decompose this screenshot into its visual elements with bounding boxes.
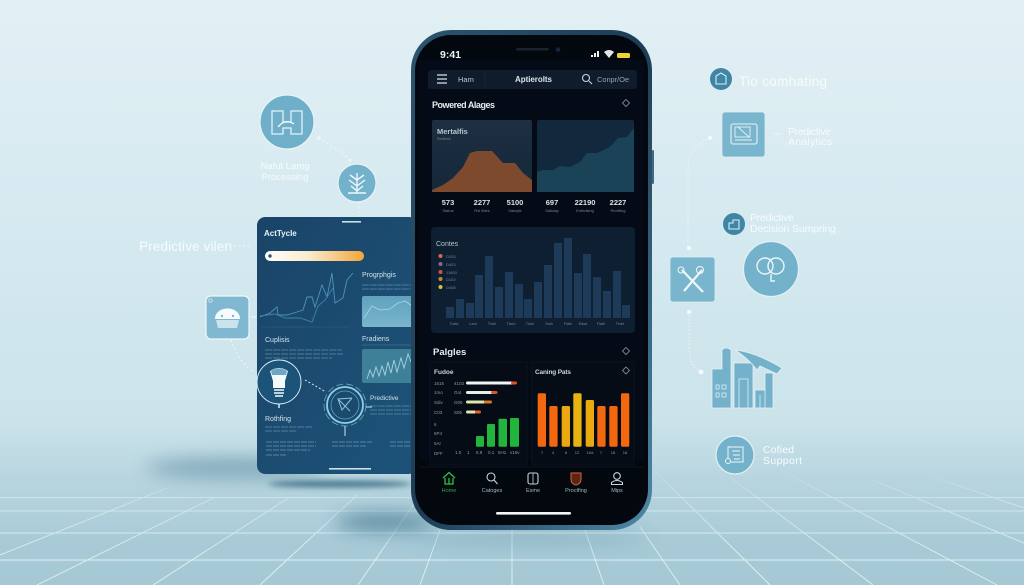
row labels: 0.1: [488, 450, 495, 455]
label: predictive analytics: [788, 126, 832, 148]
icon: tools: [670, 257, 715, 302]
tab: pricing: Proctfing: [565, 488, 587, 494]
phone body: [411, 30, 652, 530]
stats row: 2227: [610, 198, 626, 207]
row labels: DFF: [434, 451, 443, 456]
legend: D102: [446, 277, 456, 282]
stats row: 5100: [507, 198, 523, 207]
label: support: [763, 444, 802, 467]
row labels: 4103: [454, 381, 465, 386]
tab: home: [442, 472, 456, 494]
tablet top handle: [342, 221, 361, 223]
x axis labels: Tolas: [450, 322, 459, 326]
legend: D203: [446, 254, 456, 259]
label: predictive analytics: Analytics: [788, 136, 832, 148]
label: predictive decision support: Decision Sumpring: [750, 223, 836, 235]
icon: buildings and hammer: [712, 348, 782, 408]
panel: orange bars: 7: [600, 450, 603, 455]
nav bar: Conpr/Oe: [597, 75, 629, 84]
panel: orange bars: 4: [552, 450, 555, 455]
row labels: Got: [454, 390, 462, 395]
tab: learn: [526, 473, 540, 494]
mini chart: light area: [362, 296, 411, 327]
tablet title: ActTycle: [264, 229, 297, 238]
x axis labels: Tkdrt: [616, 322, 625, 326]
icon: dome face: [206, 296, 256, 339]
icon: top right badge: [710, 68, 732, 90]
legend: D408: [446, 285, 456, 290]
label: top right heading: Tio comhating: [739, 74, 827, 89]
stats row: 22190: [575, 198, 595, 207]
text block: rothfing: [265, 416, 412, 455]
stats row: 2277: [474, 198, 490, 207]
screen tint: [419, 60, 644, 460]
x axis labels: Scth: [545, 322, 553, 326]
status bar time: 9:41: [440, 49, 461, 61]
side button: [652, 150, 654, 184]
card: area chart teal: [537, 120, 634, 192]
stats row: Rol fides: [474, 208, 490, 213]
text block: prognosis: Progrphgis: [362, 272, 396, 279]
tablet bottom handle: [329, 468, 371, 470]
x axis labels: Edsrt: [579, 322, 588, 326]
tab: learn: Esme: [526, 488, 540, 494]
nav bar: [428, 70, 637, 89]
horizontal bars: [466, 382, 517, 414]
icon: light bulb: [257, 360, 301, 408]
panel: main bar chart: [431, 227, 635, 333]
legend: J1603: [446, 270, 458, 275]
panel: orange bars: 18: [611, 450, 616, 455]
label: natural language processing: Nafut Lamg: [260, 161, 310, 172]
phone: [411, 30, 654, 530]
home indicator: [496, 512, 571, 515]
card: area chart orange: Mertalfis: [437, 127, 468, 136]
icon: tree: [338, 164, 376, 202]
x axis labels: Flath: [597, 322, 605, 326]
nav bar: Ham: [458, 75, 474, 84]
text block: predictions: [362, 336, 412, 345]
icon: predictive analytics: [722, 112, 765, 157]
text block: captions: Cuplisis: [265, 337, 290, 344]
panel: orange bars: [532, 362, 634, 465]
row labels: 1mo: [434, 390, 443, 395]
text block: rothfing: Rothfing: [265, 416, 291, 423]
floor shadows: [145, 458, 650, 543]
label: natural language processing: Processing: [262, 172, 308, 183]
legend: [438, 254, 458, 290]
row labels: C03: [434, 410, 443, 415]
text block: predictions: Fradiens: [362, 336, 390, 343]
tab: home: Home: [442, 488, 456, 494]
stats row: 697: [546, 198, 558, 207]
tab: maps: Mips: [611, 488, 623, 494]
connector: right dotted path: [687, 136, 712, 374]
label: predictive vision: Predictive vilen: [139, 239, 232, 254]
label: support: Cofied: [763, 444, 794, 456]
row labels: 1615: [434, 381, 445, 386]
text block: captions: [265, 337, 343, 358]
panel: orange bars: 6: [565, 450, 568, 455]
section heading: ratings: Palgles: [433, 347, 466, 358]
stats row: 573: [442, 198, 454, 207]
label: predictive analytics: Predictive: [788, 126, 831, 138]
row labels: Sdiv: [434, 400, 444, 405]
row labels: 5H1: [498, 450, 507, 455]
x axis labels: Tlotn: [526, 322, 534, 326]
chart divider: [262, 326, 350, 328]
connector: bulb to target: [305, 380, 326, 392]
stats row: Sample: [508, 208, 523, 213]
panel: orange bars: 18: [623, 450, 628, 455]
row labels: 1: [467, 450, 470, 455]
icon: target ring: [324, 384, 372, 436]
x axis labels: [450, 322, 625, 326]
x axis labels: Tlsch: [506, 322, 516, 326]
row labels: 5Ar: [434, 441, 442, 446]
stats row: Rentfing: [611, 208, 625, 213]
panel: tablet dashboard: [257, 217, 417, 474]
icon: natural language processing: [260, 95, 314, 149]
row labels: [434, 381, 520, 456]
card: area chart orange: Realtime: [437, 137, 451, 141]
panel: funnel bars: [430, 362, 527, 465]
x axis labels: Lant: [469, 322, 478, 326]
stats row: [442, 198, 626, 213]
text block: predictive: Predictive: [370, 395, 399, 402]
row labels: 6: [434, 422, 437, 427]
panel: orange bars: 7: [541, 450, 544, 455]
panel: orange bars: Caning Pats: [535, 369, 571, 376]
status icons: [591, 50, 630, 58]
section heading: powered: [432, 100, 630, 110]
icon: support: [716, 436, 754, 474]
x axis labels: Tloth: [488, 322, 496, 326]
text block: predictive: [370, 395, 412, 414]
panel: funnel bars: Fudoe: [434, 369, 454, 376]
stats row: Status: [442, 208, 454, 213]
x axis labels: Flath: [564, 322, 572, 326]
section heading: ratings: [433, 347, 630, 358]
tab: categories: Catoges: [482, 488, 502, 494]
panel: main bar chart: Contes: [436, 241, 459, 248]
stats row: Saltday: [545, 208, 559, 213]
speaker and camera: [516, 47, 560, 52]
row labels: G05: [454, 400, 463, 405]
section heading: powered: Powered Alages: [432, 100, 495, 110]
text block: prognosis: [362, 272, 412, 289]
label: support: Support: [763, 455, 802, 467]
connector: left dotted paths: [231, 136, 359, 372]
icon: linked rings: [744, 242, 798, 296]
label: predictive decision support: [750, 212, 836, 235]
panel: orange bars: 10d: [587, 450, 593, 455]
nav bar: Aptierolts: [515, 75, 553, 84]
phone screen: [415, 35, 648, 525]
tab bar divider: [419, 466, 644, 468]
tab: categories: [482, 473, 502, 494]
label: predictive decision support: Predictive: [750, 212, 794, 224]
line chart: [260, 273, 353, 322]
row labels: S05: [454, 410, 463, 415]
row labels: 5P4: [434, 431, 443, 436]
tab: maps: [611, 473, 623, 494]
legend: D403: [446, 262, 456, 267]
stats row: Enthdsing: [576, 208, 594, 213]
connector: analytics dash: [773, 133, 781, 135]
tab: pricing: [565, 473, 587, 494]
mini chart: dark area: [362, 349, 411, 383]
row labels: v16v: [510, 450, 520, 455]
row labels: 1.0: [455, 450, 462, 455]
green bars: [476, 418, 519, 447]
row labels: 5.9: [476, 450, 483, 455]
bars: [446, 238, 630, 318]
label: natural language processing: [260, 161, 310, 183]
icon: decision badge: [723, 213, 745, 235]
floor grid: [0, 473, 1024, 585]
card: area chart orange: [432, 120, 532, 192]
progress bar: [265, 251, 364, 261]
panel: orange bars: 12: [575, 450, 580, 455]
